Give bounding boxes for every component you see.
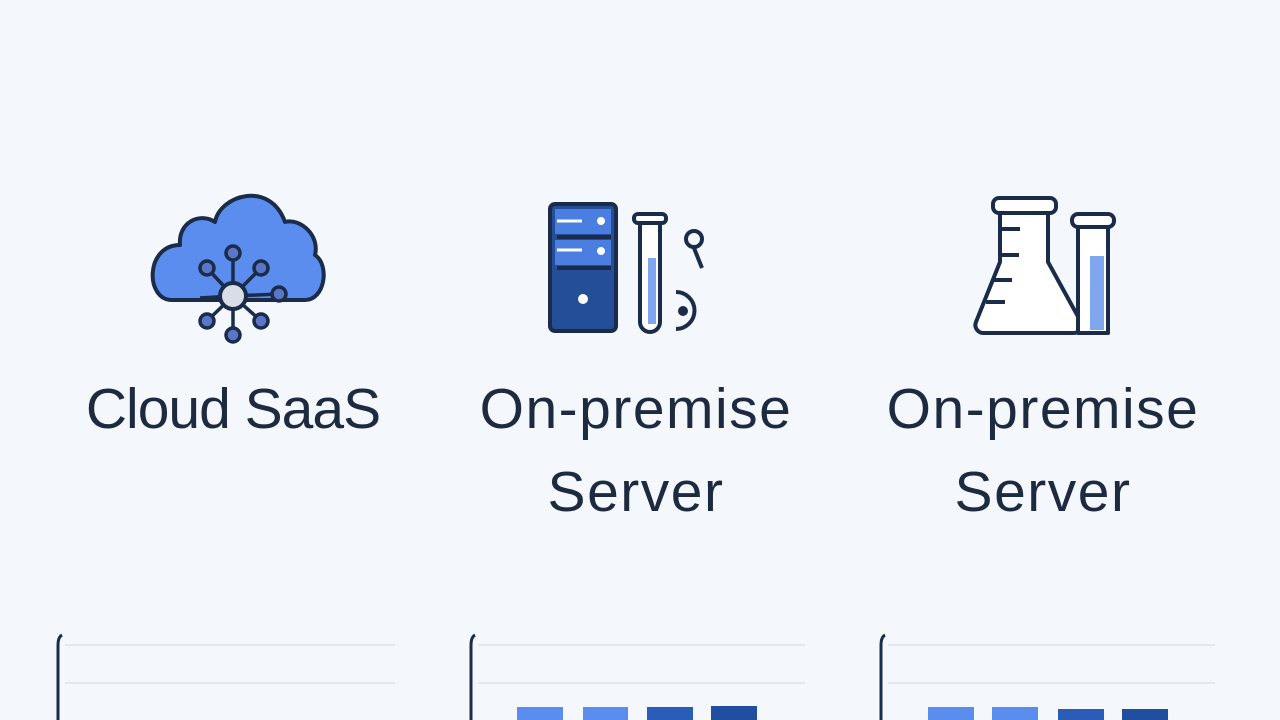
heading: On-premise Server (right): On-premise	[887, 377, 1199, 441]
icon: server and test tube	[550, 204, 702, 332]
chart: left panel	[58, 635, 395, 720]
icon: flask and test tube	[975, 198, 1114, 333]
chart: middle panel	[471, 635, 805, 720]
chart: right panel	[881, 635, 1215, 720]
heading: On-premise Server (middle): On-premise	[480, 377, 792, 441]
heading: Cloud SaaS: Cloud SaaS	[86, 377, 380, 441]
text: Server	[548, 460, 724, 524]
icon: cloud network	[153, 196, 324, 342]
text: Server	[955, 460, 1131, 524]
